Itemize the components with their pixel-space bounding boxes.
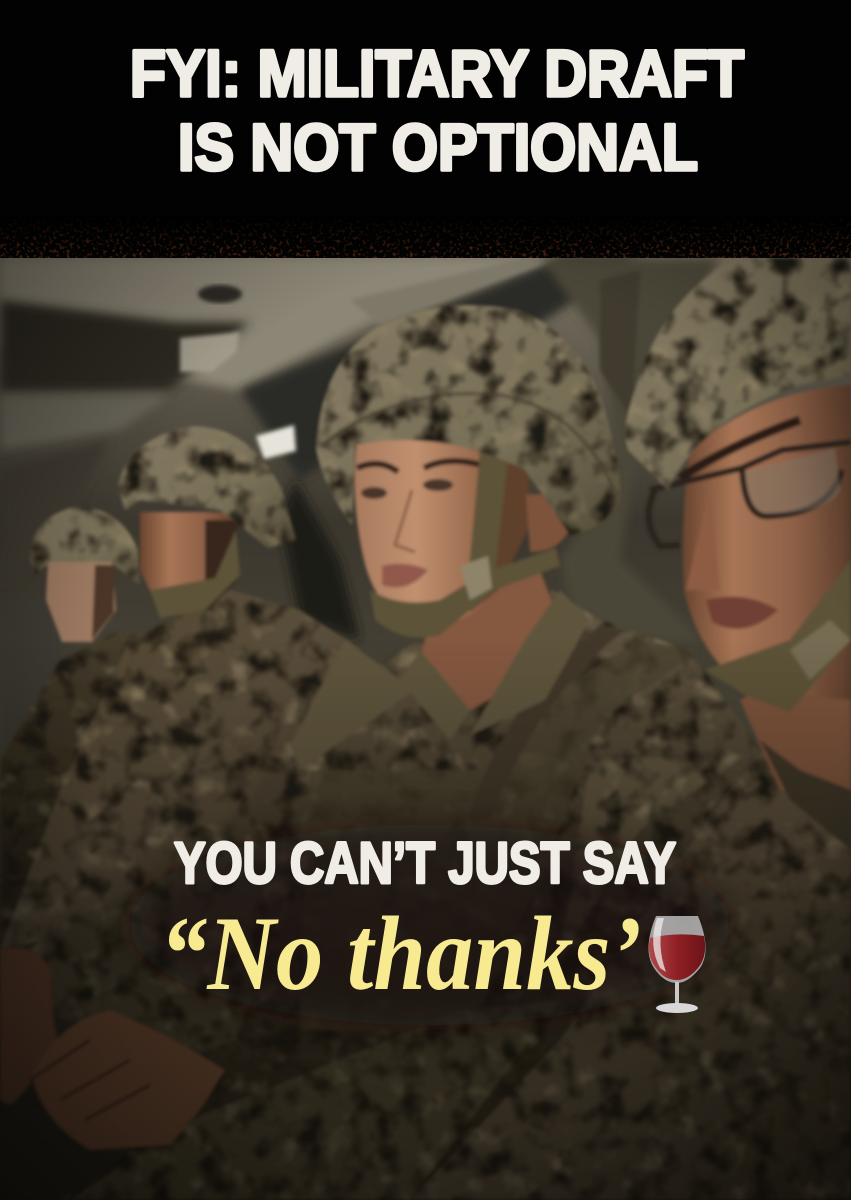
neck bbox=[740, 640, 851, 790]
icon: wine glass bbox=[648, 916, 706, 1013]
chin strap bbox=[705, 560, 851, 712]
chin strap bbox=[370, 548, 560, 638]
photo: vehicle interior background bbox=[0, 258, 851, 1200]
eyes, brows, nose, mouth bbox=[357, 461, 484, 472]
brow, nose, mouth bbox=[680, 420, 800, 478]
helmet rim bbox=[322, 394, 614, 490]
header band bbox=[0, 0, 851, 258]
helmet bbox=[625, 258, 851, 490]
face bbox=[683, 385, 851, 700]
title bbox=[130, 36, 744, 184]
hands bbox=[0, 948, 225, 1150]
torso and vest bbox=[60, 590, 760, 1200]
soldier: right foreground bbox=[410, 258, 851, 1200]
lower left ground bbox=[0, 1090, 230, 1200]
lower sleeve bbox=[70, 1000, 560, 1200]
glasses bbox=[649, 442, 851, 546]
soldier: centre bbox=[0, 305, 760, 1200]
shading over photo bbox=[0, 258, 851, 1200]
soldier: second from left bbox=[0, 426, 362, 950]
right hand bbox=[32, 1010, 225, 1150]
helmet bbox=[316, 305, 620, 535]
title: IS NOT OPTIONAL bbox=[178, 110, 698, 184]
left sleeve bbox=[20, 800, 290, 1060]
vest panels bbox=[300, 640, 700, 1030]
torso bbox=[410, 740, 851, 1200]
soldier: far left bbox=[0, 507, 190, 930]
face bbox=[355, 432, 528, 628]
neck bbox=[415, 570, 555, 710]
quote: “No thanks’ bbox=[160, 895, 642, 1012]
title: FYI: MILITARY DRAFT bbox=[130, 36, 744, 110]
left hand bbox=[0, 948, 58, 1105]
subheading: YOU CAN’T JUST SAY bbox=[174, 831, 676, 896]
